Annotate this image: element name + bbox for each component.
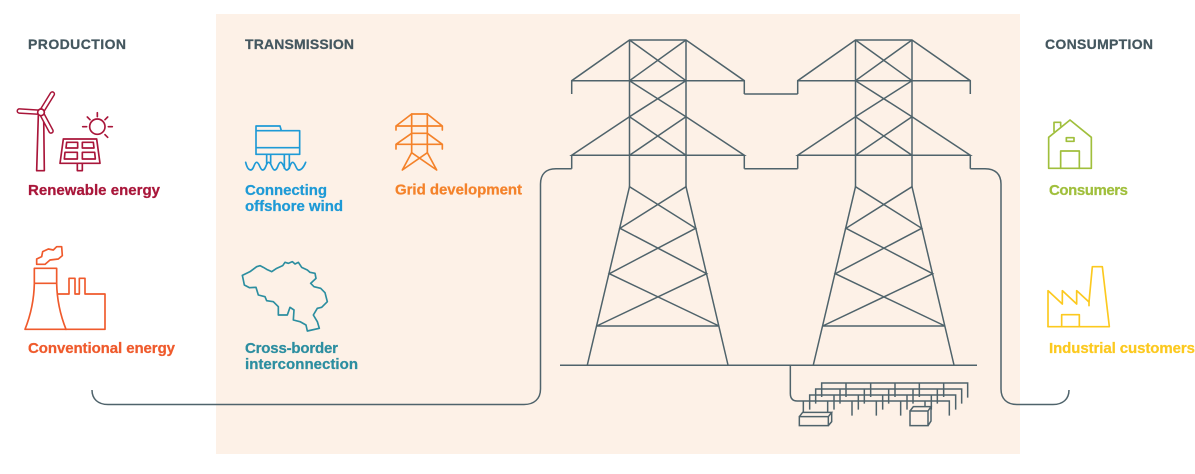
icon: conventional power plant	[25, 247, 105, 329]
power line connector: towers to consumption	[970, 169, 1069, 404]
icon: grid development pylon	[396, 114, 442, 170]
ground line	[560, 364, 977, 366]
label: connecting offshore wind	[245, 182, 343, 215]
icon: house	[1049, 120, 1091, 168]
label: consumers: Consumers	[1049, 182, 1128, 199]
label: renewable energy: Renewable energy	[28, 182, 161, 199]
substation	[790, 365, 968, 426]
label: cross-border interconnection: Cross-border	[245, 340, 338, 357]
label: connecting offshore wind: Connecting	[245, 182, 327, 199]
pylon: left tower	[572, 40, 744, 365]
label: cross-border interconnection: interconnection	[245, 356, 358, 373]
panel: transmission background	[216, 14, 1020, 454]
line link between pylon tops	[744, 94, 798, 169]
label: conventional energy: Conventional energy	[28, 340, 176, 357]
heading: consumption: CONSUMPTION	[1045, 36, 1153, 52]
icon: offshore wind platform	[246, 126, 306, 170]
substation transformer: large box	[799, 412, 832, 426]
heading: production: PRODUCTION	[28, 36, 126, 52]
heading: transmission: TRANSMISSION	[245, 36, 354, 52]
icon: wind turbine and solar panel	[19, 94, 112, 171]
pylon: right tower	[798, 40, 970, 365]
substation transformer: small box	[910, 407, 931, 426]
icon: factory	[1048, 267, 1109, 327]
label: grid development: Grid development	[395, 182, 522, 198]
icon: map of Belgium	[242, 262, 327, 331]
label: connecting offshore wind: offshore wind	[245, 198, 343, 215]
label: cross-border interconnection	[245, 340, 358, 373]
power line connector: production to towers	[92, 169, 572, 404]
label: industrial customers: Industrial customers	[1049, 340, 1195, 357]
